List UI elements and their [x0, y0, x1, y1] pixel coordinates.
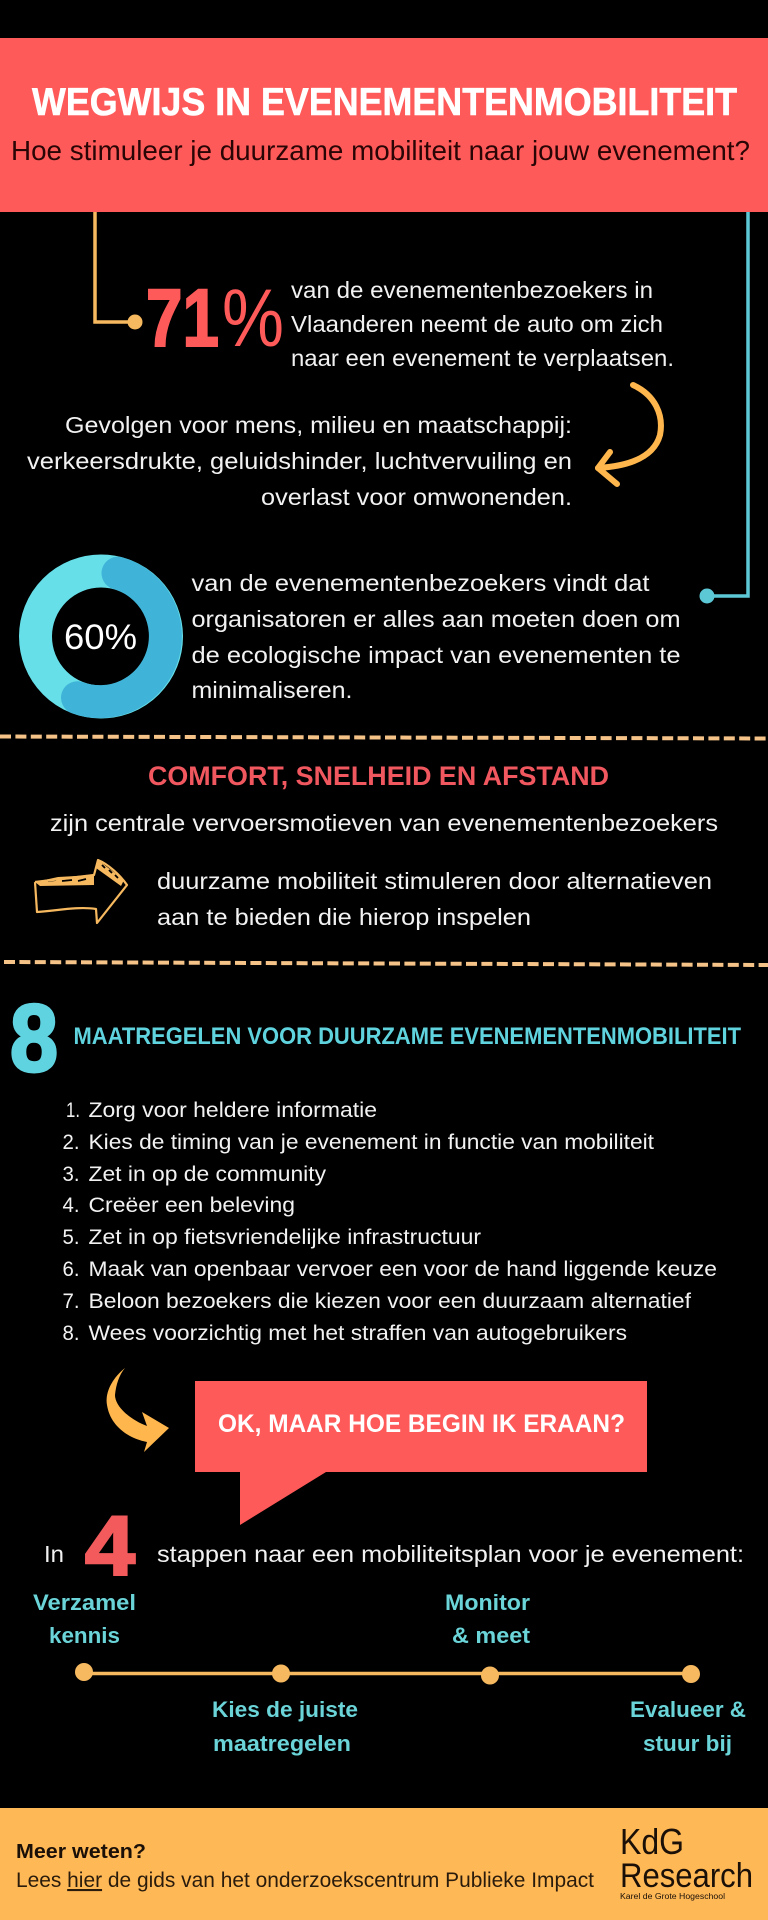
step 3 label: Monitor: [445, 1590, 530, 1615]
step 4 label: [630, 1697, 746, 1756]
text: consequences: overlast voor omwonenden.: [261, 484, 572, 510]
step 4 label: Evalueer &: [630, 1697, 746, 1722]
logo: KdG Research: [620, 1821, 753, 1901]
list: 8 measures: 2.: [62, 1131, 80, 1154]
heading: four steps: 4: [85, 1499, 135, 1593]
step 4 label: stuur bij: [643, 1731, 732, 1756]
statistic: 71%: %: [222, 273, 284, 364]
icon: curved arrow pointing left: [598, 385, 661, 484]
list: 8 measures: 5.: [62, 1226, 80, 1249]
list: 8 measures: Zet in op fietsvriendelijke infrastructuur: [88, 1226, 481, 1249]
step 2 label: maatregelen: [213, 1731, 351, 1756]
text: 71% explanation: [291, 277, 674, 371]
icon: curved arrow to speech bubble: [107, 1368, 169, 1452]
connector line: teal to 60%: [700, 212, 748, 604]
text: consequences: verkeersdrukte, geluidshinder, luchtvervuiling en: [27, 448, 572, 474]
step 1 label: Verzamel: [33, 1590, 136, 1615]
statistic: 71%: [146, 273, 284, 364]
list: 8 measures: 3.: [62, 1163, 80, 1186]
speech bubble: [195, 1381, 647, 1525]
heading: four steps: stappen naar een mobiliteitsplan voor je evenement:: [157, 1541, 744, 1567]
step 2 label: [212, 1697, 358, 1756]
header banner: [0, 38, 768, 212]
list: 8 measures: 6.: [62, 1258, 80, 1281]
text: consequences: [27, 412, 572, 510]
text: stimulate sustainable mobility: duurzame mobiliteit stimuleren door alternatieven: [157, 868, 712, 894]
donut chart: 60%: 60%: [64, 618, 137, 657]
logo: KdG Research: Research: [620, 1857, 753, 1895]
step 2 label: Kies de juiste: [212, 1697, 358, 1722]
icon: sketched block arrow: [35, 860, 127, 923]
list: 8 measures: Maak van openbaar vervoer een voor de hand liggende keuze: [88, 1258, 717, 1281]
text: 60% explanation: organisatoren er alles aan moeten doen om: [192, 606, 680, 632]
heading: comfort: COMFORT, SNELHEID EN AFSTAND: [148, 761, 609, 791]
connector line: orange to 71%: [95, 212, 142, 330]
step 3 label: & meet: [452, 1623, 531, 1648]
list: 8 measures: 8.: [62, 1322, 80, 1345]
text: 71% explanation: Vlaanderen neemt de auto om zich: [291, 311, 663, 337]
heading: four steps: In: [44, 1541, 64, 1567]
statistic: 71%: 71: [146, 273, 219, 364]
donut chart: 60%: [36, 571, 166, 702]
step 3 label: [445, 1590, 531, 1648]
list: 8 measures: Zet in op de community: [88, 1163, 327, 1186]
text: consequences: Gevolgen voor mens, milieu en maatschappij:: [65, 412, 572, 438]
text: central motives: zijn centrale vervoersmotieven van evenementenbezoekers: [50, 810, 718, 836]
text: 60% explanation: minimaliseren.: [192, 677, 352, 703]
subtitle: Hoe stimuleer je duurzame mobiliteit naar jouw evenement?: [11, 135, 750, 166]
logo: KdG Research: Karel de Grote Hogeschool: [620, 1892, 725, 1901]
footer text: Meer weten?: [16, 1841, 146, 1863]
text: stimulate sustainable mobility: aan te bieden die hierop inspelen: [157, 904, 531, 930]
step 1 label: [33, 1590, 136, 1648]
speech bubble: OK, MAAR HOE BEGIN IK ERAAN?: [218, 1410, 625, 1438]
step 1 label: kennis: [49, 1623, 120, 1648]
list: 8 measures: 4.: [62, 1194, 80, 1217]
logo: KdG Research: KdG: [620, 1821, 684, 1862]
list: 8 measures: 7.: [62, 1290, 80, 1313]
text: stimulate sustainable mobility: [157, 868, 712, 930]
number 8: 8: [10, 985, 58, 1092]
heading: four steps: [44, 1499, 744, 1593]
list: 8 measures: Zorg voor heldere informatie: [88, 1099, 377, 1122]
list: 8 measures: Creëer een beleving: [88, 1194, 295, 1217]
text: 60% explanation: de ecologische impact van evenementen te: [192, 642, 680, 668]
list: 8 measures: [62, 1099, 717, 1345]
footer band: Lees hier de gids van het onderzoekscentrum Publieke Impact: [16, 1869, 594, 1892]
footer band: [0, 1808, 768, 1920]
list: 8 measures: 1.: [66, 1099, 80, 1122]
text: 60% explanation: [192, 570, 680, 703]
list: 8 measures: Kies de timing van je evenement in functie van mobiliteit: [88, 1131, 654, 1154]
list: 8 measures: Wees voorzichtig met het straffen van autogebruikers: [88, 1322, 627, 1345]
text: 71% explanation: naar een evenement te verplaatsen.: [291, 345, 674, 371]
list: 8 measures: Beloon bezoekers die kiezen voor een duurzaam alternatief: [88, 1290, 691, 1313]
text: 60% explanation: van de evenementenbezoekers vindt dat: [192, 570, 650, 596]
timeline: [75, 1663, 700, 1684]
text: 71% explanation: van de evenementenbezoekers in: [291, 277, 653, 303]
